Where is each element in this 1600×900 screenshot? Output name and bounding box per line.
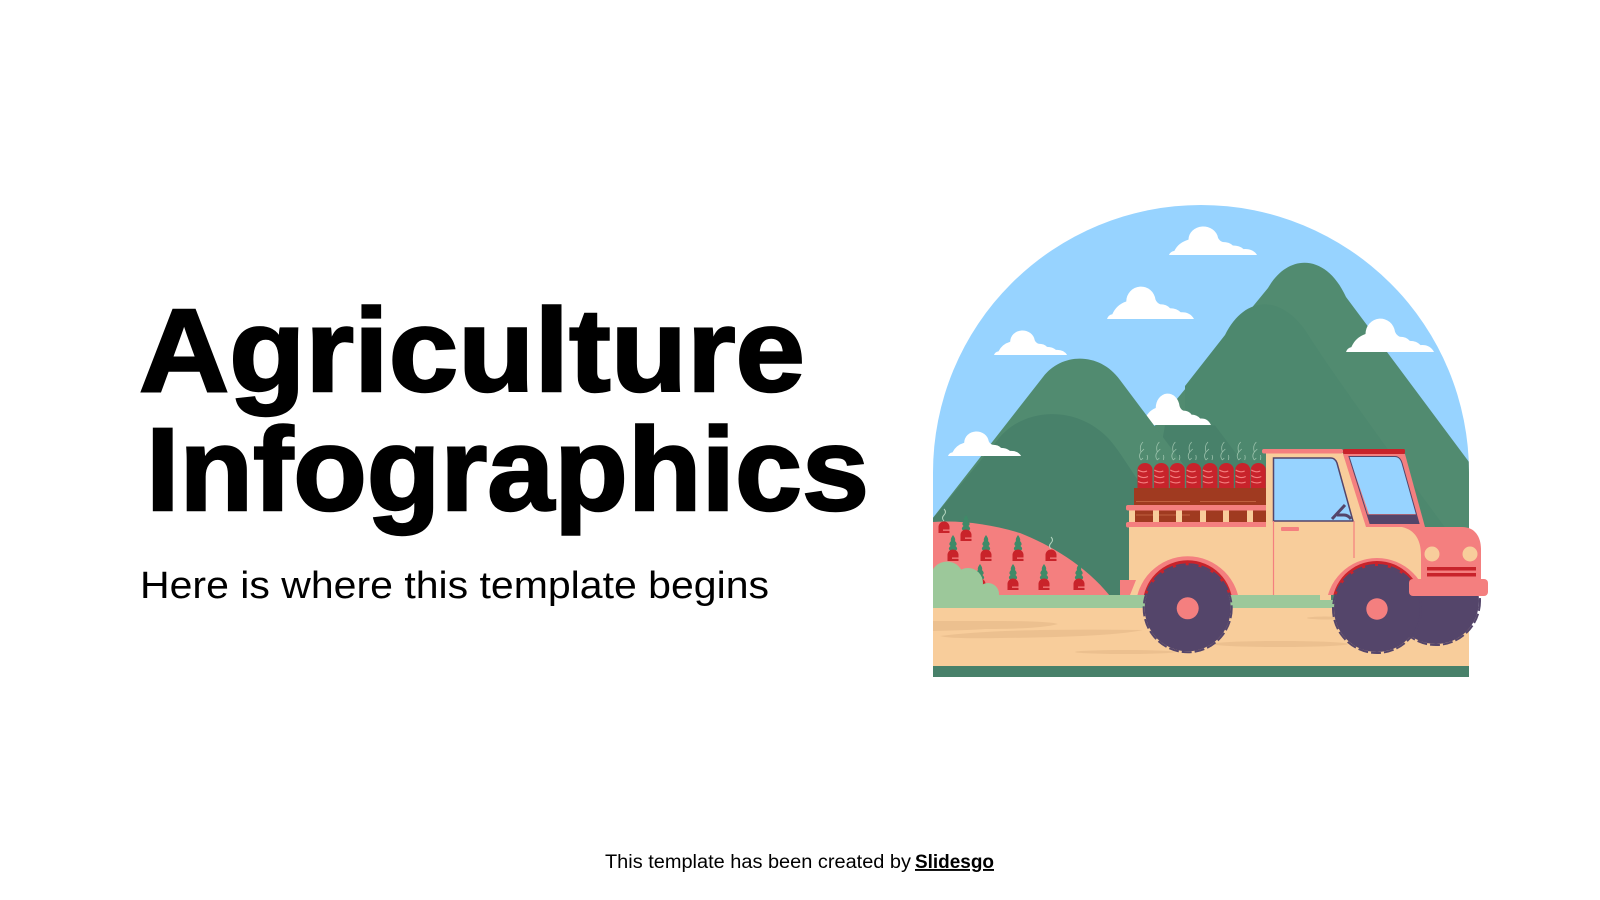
footer credit: This template has been created by [605,852,912,873]
clouds [948,227,1434,456]
left mountain [933,358,1186,595]
sky [933,205,1469,518]
bottom band [933,666,1469,677]
subtitle: Here is where this template begins [140,565,769,607]
background scene [925,205,1469,677]
door lines and handle [1274,521,1354,595]
hood front and grille [1402,527,1481,582]
big mountain [1154,262,1469,600]
steering wheel [1332,505,1351,519]
roof [1262,449,1405,454]
cargo body and hood [1129,453,1421,600]
windshield frame [1343,454,1425,527]
illustration: farm scene with truck [925,205,1488,677]
windshield [1349,456,1419,524]
pink field hill [933,521,1110,596]
side window [1274,458,1353,521]
bush [933,562,999,595]
far front wheel [1392,557,1480,645]
dark band behind the truck [1163,426,1185,466]
rear wheel [1144,564,1232,652]
title [139,285,869,536]
green strip [933,595,1340,608]
ground shadows [933,616,1348,654]
front wheel [1333,565,1421,653]
front wheel arch [1328,558,1418,595]
bumper [1409,579,1488,596]
title: Infographics [146,404,869,536]
crate [1134,488,1266,505]
tail light [1120,580,1136,595]
rear wheel arch [1138,556,1238,595]
cargo rails [1126,505,1268,528]
cloud in front of big mountain [1140,394,1211,425]
ground [933,608,1469,666]
title: Agriculture [139,285,805,417]
crate carrots [1138,442,1266,488]
footer credit: Slidesgo [915,852,994,873]
field carrots [938,509,1084,590]
truck [1120,442,1488,660]
